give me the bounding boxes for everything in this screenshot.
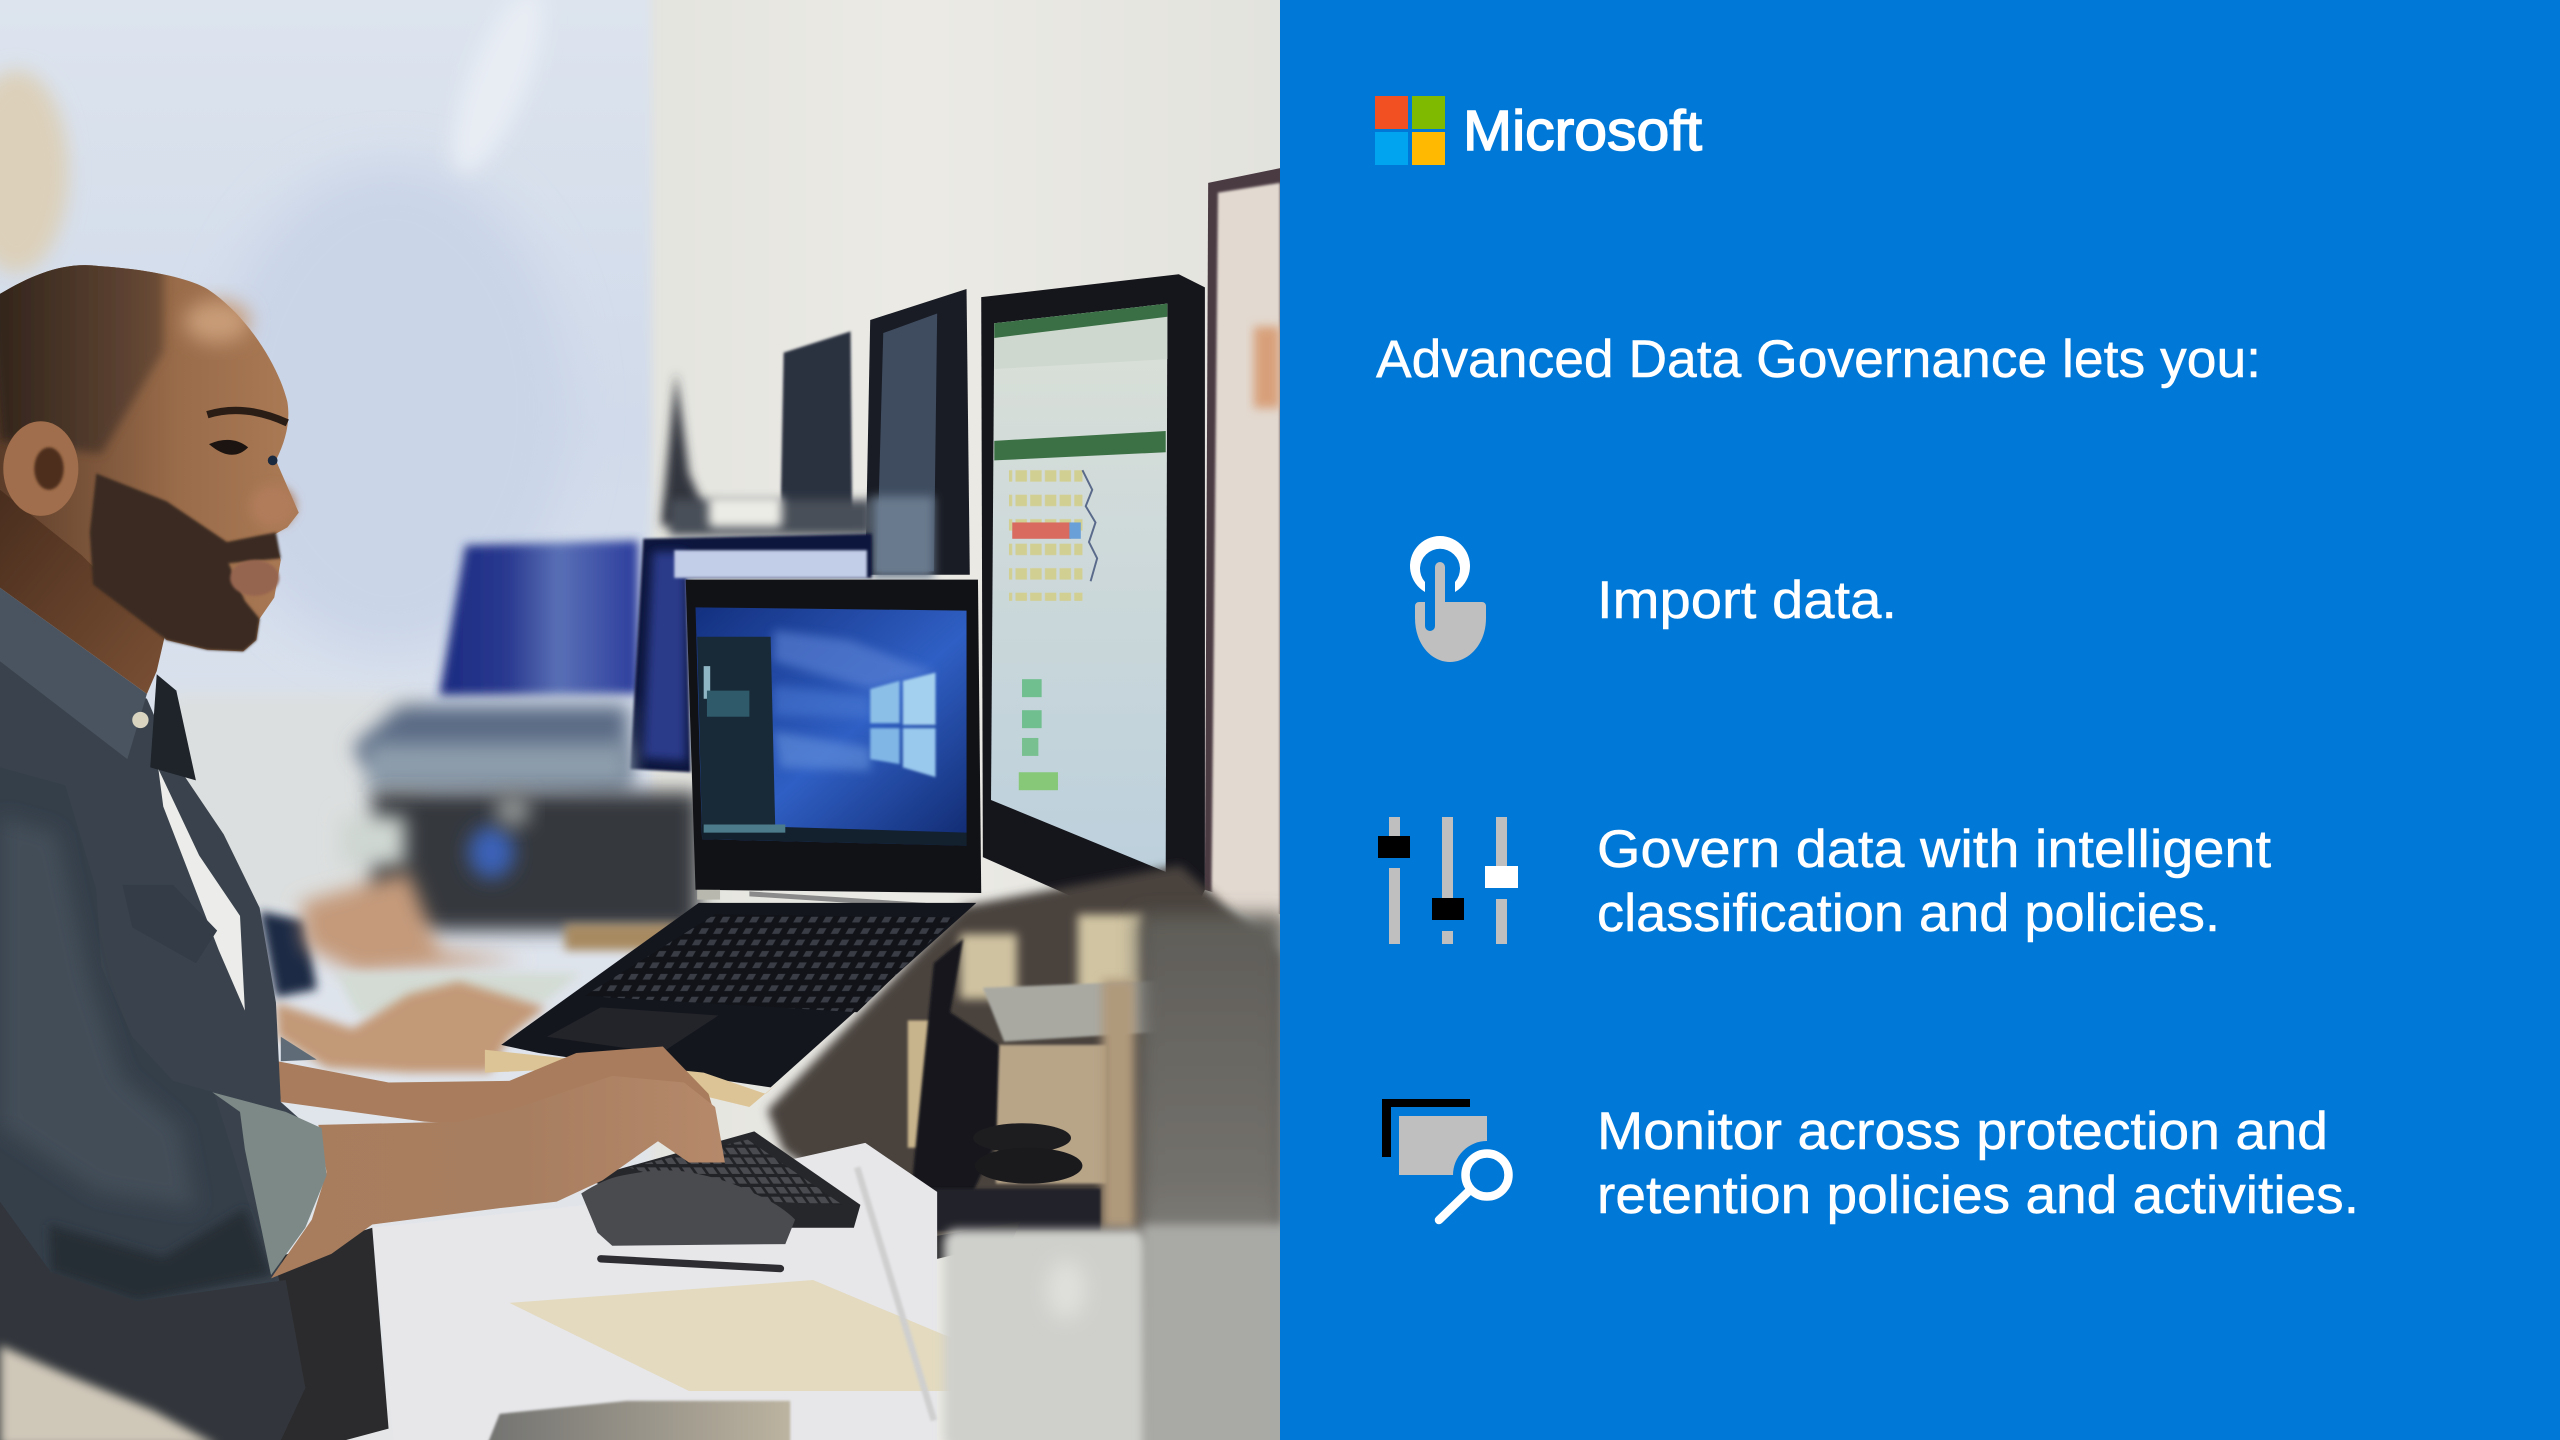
desk items behind man: stand, shelf, headphones, cables [767,865,1285,1440]
left dark panel and taskbar [697,637,776,839]
wood panels [960,934,1017,999]
icon: sliders [1378,817,1518,944]
text: import data: Import data. [1597,571,1897,630]
text: monitor: Monitor across protection and [1597,1102,2328,1161]
chest pocket flap [122,885,217,963]
wooden post [1102,980,1135,1228]
logo squares [1375,96,1445,165]
lower right grey blur [1143,1224,1290,1440]
logo wordmark: Microsoft [1463,99,1702,163]
icon: monitor with magnifier [1382,1099,1521,1220]
text: govern data [1597,820,2271,943]
button [132,712,149,728]
headphones [908,939,999,1228]
heading: Advanced Data Governance lets you: [1376,330,2261,389]
stand base [908,1189,1100,1231]
laptop hinge [749,891,926,908]
wallpaper rays [774,630,936,689]
eyebrow [207,410,287,423]
nose [250,485,296,527]
pale desk in the distance [163,694,424,914]
fade at right of stand [1138,914,1285,1440]
small sleeve behind [281,1037,317,1061]
paper [336,973,581,1016]
far forearm and hand [278,1047,718,1127]
far monitors [439,289,970,772]
man [0,245,725,1440]
background: soft lavender wall and white office wall [0,0,1304,1440]
near background hand [276,981,545,1073]
main spreadsheet monitor [981,274,1205,944]
text: monitor [1597,1102,2359,1225]
shaved hair [0,245,163,454]
blurred desks, keyboards and hands behind the laptop [260,705,699,1073]
laptop keyboard deck [501,903,976,1087]
text: monitor: retention policies and activities. [1597,1166,2359,1225]
icon: touch hand [1410,536,1486,662]
Windows logo [870,673,936,777]
blurred shoulder at bottom left [0,1345,219,1440]
notebook [509,1280,957,1391]
lips [230,560,279,596]
navy sleeve [260,911,317,998]
white tee [158,769,245,1011]
white desk [372,1143,937,1440]
shelf with papers [983,980,1189,1042]
bald highlight [184,300,250,343]
beard [90,473,281,651]
middle monitor [630,534,872,772]
text: govern data: Govern data with intelligent [1597,820,2271,879]
window light streak [434,0,562,183]
lower torso [0,1202,305,1440]
near forearm and hand [271,1076,725,1278]
rolled cuff [212,1092,327,1275]
keyboard [584,1131,860,1228]
Microsoft logo [1375,96,1702,165]
mouse [581,1170,795,1246]
blurred colleague in the background [0,70,69,273]
wooden laptop stand [485,1050,780,1107]
text: govern data: classification and policies. [1597,884,2220,943]
dark placket and collar [150,674,196,780]
ear [3,421,78,516]
right edge monitor [1205,168,1280,931]
coffee mug [944,1229,1146,1440]
blurred object at bottom [487,1401,790,1440]
head [0,265,299,651]
neck [0,490,167,694]
pen on desk [601,1259,780,1269]
chair / dark background behind torso [278,1228,389,1440]
torso shirt [0,591,327,1440]
dark area under monitors [767,865,1280,1241]
sleeve [0,767,271,1301]
eye [209,440,248,455]
far hands [300,872,526,973]
photo panel: man working at a row of computers [0,0,1280,1440]
slim stylus blur [857,1167,934,1420]
laptop with Windows wallpaper [485,580,981,1107]
blurred blue monitor [439,540,638,696]
